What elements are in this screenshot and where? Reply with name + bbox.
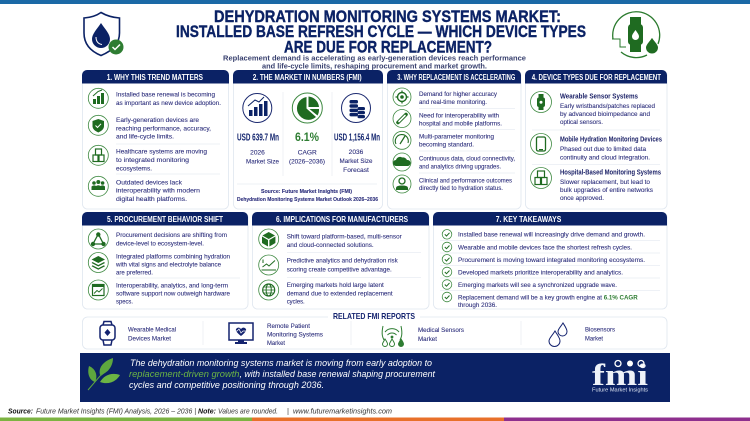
source line: Future Market Insights (FMI) Analysis, 2026 – 2036 | [36, 408, 196, 415]
stat: 2026 market size: 2026 [250, 149, 265, 156]
text: interoperability analytics: specs. [116, 298, 133, 305]
takeaways text [458, 232, 645, 309]
text: medical sensors [418, 327, 465, 343]
heading: related reports: RELATED FMI REPORTS [333, 311, 415, 321]
takeaways text: through 2036. [458, 302, 497, 309]
text: hospital-based systems: bulk upgrades of entire networks [560, 187, 654, 194]
text: biosensors [585, 326, 616, 342]
heading: panel 6 [252, 212, 429, 226]
source line: Values are rounded. [218, 408, 278, 415]
takeaways text: Developed markets prioritize interoperability and analytics. [458, 269, 623, 276]
icon: bar chart [243, 94, 272, 122]
heading: panel 1 [82, 70, 229, 84]
banner text: cycles and competitive positioning through 2036. [129, 380, 324, 390]
stat: CAGR: (2026–2036) [289, 158, 325, 165]
text: demand for accuracy [419, 91, 498, 106]
icon: globe [259, 280, 279, 300]
text: continuous data: Continuous data, cloud connectivity, [419, 155, 515, 162]
icon: hospital network [88, 145, 108, 165]
text: emerging markets [287, 282, 393, 305]
text: hospital-based systems: once approved. [560, 195, 604, 202]
text: wearable sensor systems: optical sensors. [560, 119, 603, 126]
text: wearable sensor systems [560, 93, 655, 126]
icon: target [393, 88, 411, 106]
subtitle: and life-cycle limits, reshaping procurement and market growth. [262, 63, 487, 70]
title: ARE DUE FOR REPLACEMENT? [284, 38, 492, 56]
source line: Note: [198, 408, 216, 415]
text: integrated platforms: are preferred. [116, 269, 153, 276]
text: clinical outcomes: directly tied to hydration status. [419, 185, 503, 192]
text: procurement decisions [116, 232, 227, 247]
text: medical sensors: Market [418, 336, 437, 343]
text: emerging markets: demand due to extended replacement [287, 290, 393, 297]
text: outdated devices [116, 179, 200, 203]
stat: 2036 forecast: USD 1,156.4 Mn [334, 132, 380, 144]
icon: clinician [393, 175, 411, 193]
source line: Source: [8, 408, 33, 415]
stat: 2036 forecast: Market Size [340, 158, 373, 165]
text: remote patient monitoring: Remote Patient [267, 323, 310, 330]
text: emerging markets: Emerging markets hold large latent [287, 282, 384, 289]
stat: 2036 forecast [334, 132, 380, 174]
text: remote patient monitoring: Monitoring Systems [267, 331, 324, 338]
text: wearable medical devices [128, 326, 176, 342]
text: installed base renewal [116, 91, 221, 107]
title: DEHYDRATION MONITORING SYSTEMS MARKET: [214, 7, 561, 26]
panel: key takeaways [433, 212, 667, 309]
title [176, 7, 586, 56]
heading: panel 4 [525, 70, 667, 84]
text: predictive analytics: Predictive analytics and dehydration risk [287, 257, 398, 264]
stat: 2026 market size: Market Size [246, 158, 279, 165]
icon: trend line [259, 255, 279, 275]
heading: panel 5: 5. PROCUREMENT BEHAVIOR SHIFT [107, 215, 223, 224]
text: continuous data [419, 155, 515, 170]
heading: panel 5 [82, 212, 248, 226]
heading: panel 6: 6. IMPLICATIONS FOR MANUFACTURERS [276, 215, 409, 224]
subtitle: Replacement demand is accelerating as early-generation devices reach performance [223, 56, 526, 62]
takeaways text: Emerging markets will see a synchronized upgrade wave. [458, 282, 617, 289]
banner text [129, 358, 435, 390]
panel: related FMI reports [82, 310, 667, 349]
source note: Dehydration Monitoring Systems Market Outlook 2026–2036 [237, 197, 379, 203]
heading: panel 1: 1. WHY THIS TREND MATTERS [107, 73, 204, 82]
text: remote patient monitoring: Market [267, 340, 285, 347]
text: interoperability need: Need for interoperability with [419, 112, 499, 119]
source line: www.futuremarketinsights.com [293, 408, 392, 415]
text: hospital-based systems: Slower replacement, but lead to [560, 179, 650, 186]
text: wearable medical devices: Wearable Medical [128, 326, 176, 334]
banner text: , with installed base renewal shaping procurement [240, 369, 435, 379]
text: early-generation devices [116, 117, 211, 141]
checklist icons [442, 230, 452, 302]
text: early-generation devices: and life-cycle limits. [116, 134, 174, 141]
text: healthcare systems [116, 149, 207, 172]
icon: pie chart [292, 93, 322, 123]
text: emerging markets: cycles. [287, 298, 305, 305]
text: mobile hydration devices: Mobile Hydration Monitoring Devices [560, 136, 662, 143]
text: outdated devices: interoperability with modern [116, 188, 200, 195]
icon: growth chart [88, 88, 108, 108]
logo: FMI: Future Market Insights [592, 388, 648, 394]
icon: smartwatch with drop [612, 12, 660, 58]
text: integrated platforms [115, 253, 230, 276]
text: installed base renewal: as important as new device adoption. [116, 100, 221, 107]
icon: analytics window [88, 280, 108, 300]
icon: hospital building [530, 168, 552, 188]
icon: mobile device [530, 134, 552, 154]
text: wearable sensor systems: Wearable Sensor Systems [560, 93, 638, 100]
text: healthcare systems: to integrated monitoring [116, 157, 189, 164]
text: platform-based shift: and cloud-connected solutions. [287, 242, 374, 249]
text: predictive analytics: scoring create competitive advantage. [287, 266, 392, 273]
source line: | [287, 408, 289, 415]
stat: 2026 market size: USD 639.7 Mn [237, 132, 279, 144]
text: multi-parameter: Multi-parameter monitoring [419, 133, 494, 140]
panel: why replacement is accelerating [387, 70, 521, 209]
icon: gauge [393, 131, 411, 149]
text: predictive analytics [287, 257, 398, 273]
source line [8, 408, 392, 415]
text: mobile hydration devices: Phased out due to limited data [560, 146, 646, 153]
text: continuous data: and analytics driving upgrades. [419, 163, 501, 170]
banner text: The dehydration monitoring systems market is moving from early adoption to [130, 358, 432, 368]
icon: wearable sensor [530, 92, 552, 112]
text: outdated devices: Outdated devices lack [116, 179, 183, 186]
text: wearable medical devices: Devices Market [128, 335, 171, 342]
heading: panel 7 [433, 212, 667, 226]
text: platform-based shift: Shift toward platform-based, multi-sensor [287, 233, 402, 240]
text: interoperability analytics: Interoperability, analytics, and long-term [116, 282, 228, 289]
source note [237, 189, 379, 203]
text: outdated devices: digital health platforms. [116, 196, 187, 203]
text: interoperability analytics: software support now outweigh hardware [116, 290, 230, 297]
text: interoperability analytics [116, 282, 230, 305]
stat: CAGR: 6.1% [295, 132, 319, 144]
takeaways text: Wearable and mobile devices face the shortest refresh cycles. [458, 244, 632, 251]
panel: procurement behavior shift [82, 212, 248, 309]
heading: panel 7: 7. KEY TAKEAWAYS [496, 215, 562, 224]
icon: medical sensors [382, 326, 404, 346]
banner text: replacement-driven growth [129, 369, 240, 379]
text: early-generation devices: Early-generation devices are [116, 117, 199, 124]
icon: patient monitor [229, 323, 253, 344]
text: procurement decisions: device-level to ecosystem-level. [116, 240, 204, 247]
text: installed base renewal: Installed base renewal is becoming [116, 91, 215, 98]
takeaways text: Installed base renewal will increasingly drive demand and growth. [458, 232, 645, 238]
icon: shield with water drop [84, 12, 124, 56]
stat: 2026 market size [237, 132, 279, 165]
stat: 2036 forecast: Forecast [343, 167, 369, 174]
heading: panel 2 [233, 70, 383, 84]
source note: Source: Future Market Insights (FMI) [261, 189, 352, 195]
icon: coin stacks [342, 94, 370, 122]
text: integrated platforms: with vital signs and electrolyte balance [115, 261, 221, 268]
takeaways text: Procurement is moving toward integrated monitoring ecosystems. [458, 257, 645, 264]
text: procurement decisions: Procurement decisions are shifting from [116, 232, 227, 239]
icon: stacked layers [88, 252, 108, 272]
text: biosensors: Biosensors [585, 326, 616, 334]
text: healthcare systems: Healthcare systems are moving [116, 149, 207, 156]
text: medical sensors: Medical Sensors [418, 327, 465, 334]
text: integrated platforms: Integrated platforms combining hydration [116, 253, 230, 260]
text: interoperability need: hospital and mobile platforms. [419, 120, 502, 127]
text: clinical outcomes: Clinical and performance outcomes [419, 177, 513, 184]
text: mobile hydration devices [560, 136, 662, 161]
text: demand for accuracy: Demand for higher accuracy [419, 91, 498, 98]
stat: CAGR: CAGR [298, 149, 317, 156]
text: remote patient monitoring [267, 323, 324, 347]
text: hospital-based systems [560, 169, 661, 202]
text: clinical outcomes [419, 177, 513, 192]
stat: CAGR [289, 132, 325, 165]
panel: market in numbers [233, 70, 383, 209]
icon: green leaves [88, 358, 120, 390]
banner: conclusion [80, 353, 670, 402]
text: platform-based shift [287, 233, 402, 249]
panel: implications for manufacturers [252, 212, 429, 309]
panel: why this trend matters [82, 70, 229, 209]
title: INSTALLED BASE REFRESH CYCLE — WHICH DEVICE TYPES [176, 22, 586, 41]
bottom color bar [0, 418, 750, 421]
stat: 2036 forecast: 2036 [349, 149, 364, 156]
text: early-generation devices: reaching performance, accuracy, [116, 125, 211, 132]
text: demand for accuracy: and real-time monitoring. [419, 99, 487, 106]
heading: panel 3: 3. WHY REPLACEMENT IS ACCELERATING [397, 73, 515, 82]
text: healthcare systems: ecosystems. [116, 165, 152, 172]
icon: chain link [393, 110, 411, 128]
icon: biosensor drops [549, 323, 567, 346]
icon: cloud [393, 153, 411, 171]
icon: shield check [88, 115, 108, 135]
icon: cube [259, 229, 279, 249]
takeaways text: Replacement demand will be a key growth engine at [458, 294, 602, 301]
takeaways text: 6.1% CAGR [604, 294, 638, 301]
text: biosensors: Market [585, 335, 603, 342]
text: multi-parameter [419, 133, 494, 148]
heading: panel 4: 4. DEVICE TYPES DUE FOR REPLACEMENT [532, 73, 661, 82]
icon: network nodes [88, 229, 108, 249]
panel: device types due for replacement [525, 70, 667, 209]
text: multi-parameter: becoming standard. [419, 141, 474, 148]
text: hospital-based systems: Hospital-Based Monitoring Systems [560, 169, 661, 176]
text: wearable sensor systems: by advanced bioimpedance and [560, 111, 650, 118]
subtitle [223, 56, 526, 70]
text: wearable sensor systems: Early wristbands/patches replaced [560, 103, 655, 110]
top bar [0, 0, 750, 4]
icon: people group [88, 176, 108, 196]
text: interoperability need [419, 112, 502, 127]
text: mobile hydration devices: continuity and cloud integration. [560, 154, 650, 161]
logo: FMI: fmi [592, 357, 648, 392]
icon: wearable medical device [100, 322, 115, 345]
heading: panel 2: 2. THE MARKET IN NUMBERS (FMI) [253, 73, 362, 82]
